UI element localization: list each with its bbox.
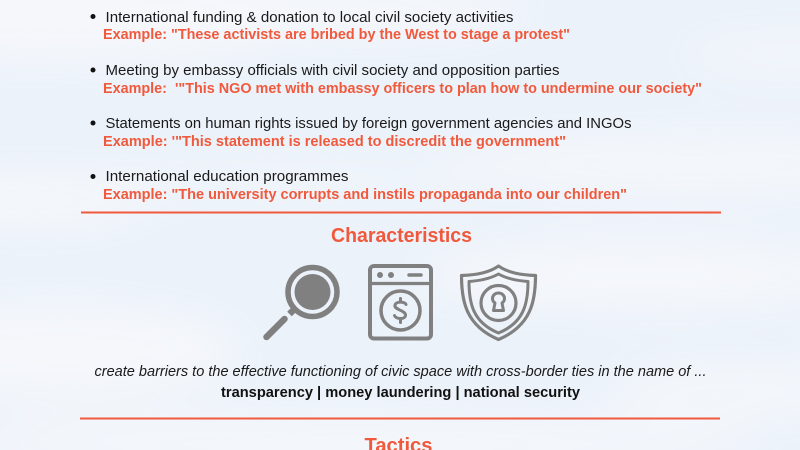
item 1: International funding & donation to local civil society activities xyxy=(106,10,514,26)
icon: magnifying glass xyxy=(266,268,337,337)
item 4 xyxy=(90,169,627,203)
icon: shield with keyhole xyxy=(462,266,536,340)
caption: create barriers to the effective functioning of civic space with cross-border ties in the name of ... xyxy=(94,364,706,380)
item 1: Example: "These activists are bribed by the West to stage a protest" xyxy=(103,27,570,43)
item 4: International education programmes xyxy=(106,169,348,185)
item 2: Meeting by embassy officials with civil society and opposition parties xyxy=(106,63,560,79)
icon: washing machine with dollar xyxy=(370,266,431,338)
keywords: transparency | money laundering | national security xyxy=(221,385,580,401)
item 4: Example: "The university corrupts and instils propaganda into our children" xyxy=(103,187,627,203)
dollar sign xyxy=(394,298,406,322)
item 2: Example: '"This NGO met with embassy officers to plan how to undermine our society" xyxy=(103,81,702,97)
list: foreign-influence examples xyxy=(90,10,702,203)
item 3: Example: '"This statement is released to discredit the government" xyxy=(103,134,566,150)
item 3 xyxy=(90,116,632,150)
heading: Characteristics: Characteristics xyxy=(331,225,472,247)
item 1 xyxy=(90,10,570,43)
item 2 xyxy=(90,63,702,97)
item 3: Statements on human rights issued by foreign government agencies and INGOs xyxy=(106,116,632,132)
